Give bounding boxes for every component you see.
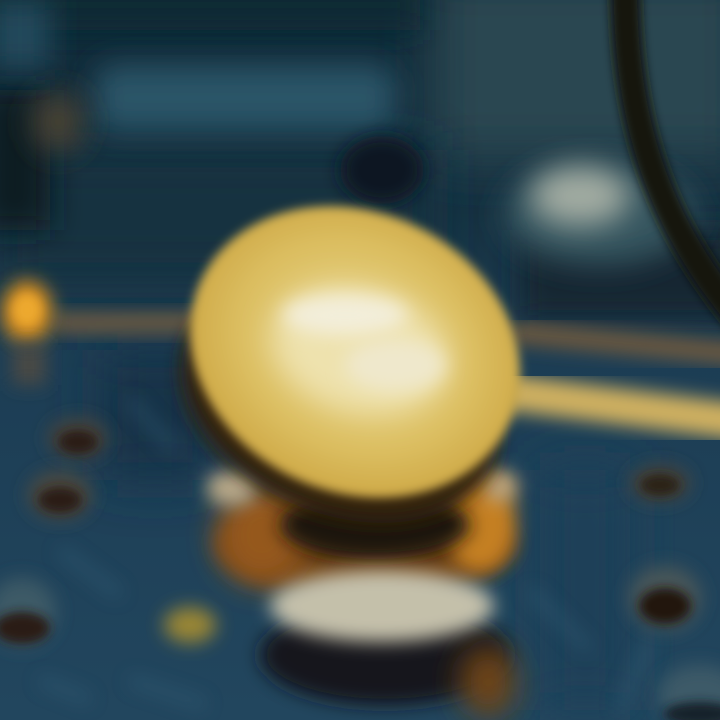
circuit solder points, left xyxy=(0,418,108,646)
dark base under the white disc xyxy=(260,605,516,718)
golden coin xyxy=(142,153,568,551)
pale disc, upper right xyxy=(505,165,695,265)
coin shadow xyxy=(145,236,535,568)
dark blurred object behind the coin xyxy=(340,136,424,204)
glowing orange node xyxy=(1,280,53,385)
dark blurred object, top left xyxy=(0,0,84,230)
dark curved cable xyxy=(625,0,720,320)
faint circuit lines xyxy=(40,400,650,710)
circuit solder points, right xyxy=(629,465,720,720)
coin highlight xyxy=(257,267,463,433)
blurred blue panel in the background xyxy=(95,65,395,131)
brown trace, right xyxy=(510,332,720,356)
small gold fleck xyxy=(164,607,216,643)
brown trace, left xyxy=(55,313,205,333)
stack of coins below xyxy=(206,470,518,597)
white disc xyxy=(270,570,494,642)
gold trace to the coin xyxy=(505,392,720,424)
